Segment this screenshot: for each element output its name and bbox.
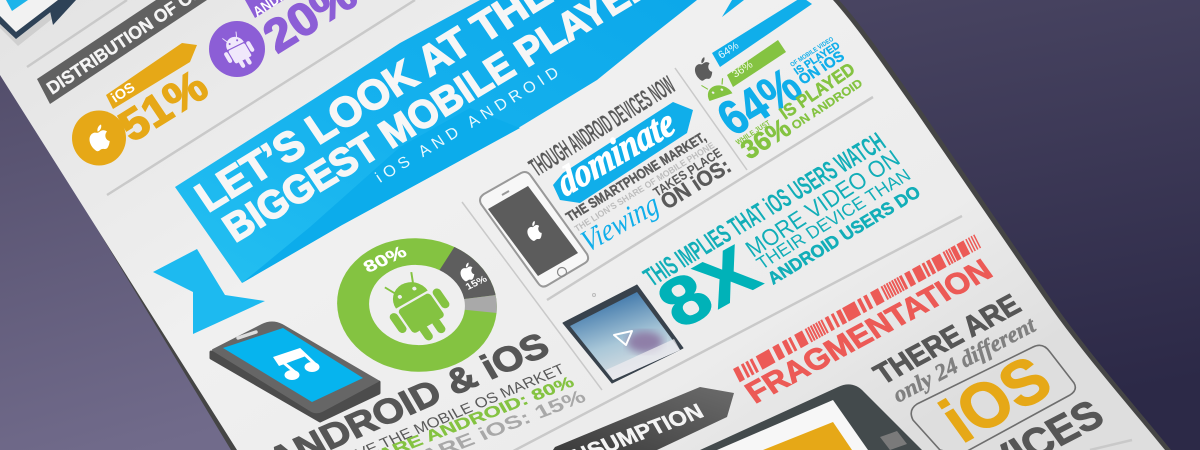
text: this implies: THIS IMPLIES THAT iOS USERS WATCH xyxy=(638,127,891,292)
text: only 24 different: only 24 different xyxy=(889,312,1040,407)
iOS flag xyxy=(106,43,197,109)
stat: 8X: 8X xyxy=(643,232,773,342)
iphone home button xyxy=(558,268,566,276)
tablet button xyxy=(880,431,907,450)
iphone screen xyxy=(488,186,578,276)
video control bar xyxy=(606,339,680,380)
icon: apple badge xyxy=(72,110,126,166)
speaker xyxy=(238,332,256,338)
icon: music note xyxy=(273,348,320,380)
stat: iOS 51%: 51% xyxy=(110,61,217,151)
text: on ios: ON iOS xyxy=(795,48,848,88)
tablet camera dot xyxy=(592,294,596,296)
background right xyxy=(700,0,1200,450)
text: while just: WHILE JUST xyxy=(734,118,772,147)
icon: apple dark xyxy=(692,56,714,82)
phone screen xyxy=(223,328,363,402)
badge word: dominate xyxy=(551,100,681,205)
bar chart: video share xyxy=(692,0,812,101)
badge: dominate xyxy=(551,100,693,205)
text: takes place: TAKES PLACE xyxy=(650,145,725,199)
video picture xyxy=(570,292,680,380)
stat: 64 percent: 64% xyxy=(707,58,812,146)
white iphone xyxy=(480,172,588,287)
icon: android center xyxy=(384,272,450,340)
text: on android: ON ANDROID xyxy=(789,76,866,132)
video subject xyxy=(627,331,663,353)
top-left tablet fragment xyxy=(0,0,76,46)
bar label 36: 36% xyxy=(731,59,755,80)
text: more video on: MORE VIDEO ON xyxy=(741,145,905,263)
tablet yellow panel xyxy=(763,422,852,450)
banner top right fragment xyxy=(722,0,744,17)
icon: play triangle xyxy=(614,331,632,345)
android flag xyxy=(245,0,284,18)
text: is played: IS PLAYED xyxy=(792,40,843,77)
text: there are: THERE ARE xyxy=(868,289,1027,391)
bar android xyxy=(727,40,786,87)
phone with music xyxy=(211,322,379,421)
banner tail xyxy=(153,249,265,334)
heading: fragmentation: FRAGMENTATION xyxy=(739,253,998,410)
icon: apple on donut xyxy=(460,262,474,282)
text: is played green: IS PLAYED xyxy=(776,59,859,123)
background left xyxy=(0,0,500,450)
flag label: iOS xyxy=(108,79,138,105)
donut chart xyxy=(337,238,497,372)
text: android users do: ANDROID USERS DO xyxy=(764,182,924,288)
section band: distribution xyxy=(37,0,207,104)
bar ios xyxy=(712,0,812,67)
iphone speaker xyxy=(502,191,509,195)
donut label 15%: 15% xyxy=(464,274,490,292)
icon: android badge xyxy=(209,21,265,77)
text: of mobile video: OF MOBILE VIDEO xyxy=(789,36,835,69)
subtitle: iOS AND ANDROID xyxy=(373,64,562,186)
donut label 80%: 80% xyxy=(360,243,410,276)
icon: android head xyxy=(701,78,732,101)
barcode strip xyxy=(733,234,981,382)
bottom tablet xyxy=(700,384,922,450)
ios devices box xyxy=(911,345,1075,450)
video tablet xyxy=(563,285,683,383)
text: smartphone market: THE SMARTPHONE MARKET, xyxy=(563,129,709,224)
icon: apple on iphone xyxy=(527,221,542,241)
section band: consumption xyxy=(535,387,734,450)
bar label 64: 64% xyxy=(717,40,741,61)
tablet screen xyxy=(717,400,868,450)
text: their device than: THEIR DEVICE THAN xyxy=(753,165,914,273)
title banner xyxy=(175,0,697,283)
stat: 36 percent: 36% xyxy=(735,113,797,165)
text: lion's share: THE LION’S SHARE OF MOBILE PHONE xyxy=(573,140,716,234)
text: viewing: Viewing xyxy=(576,186,664,259)
text: on iOS: ON iOS: xyxy=(656,153,736,214)
